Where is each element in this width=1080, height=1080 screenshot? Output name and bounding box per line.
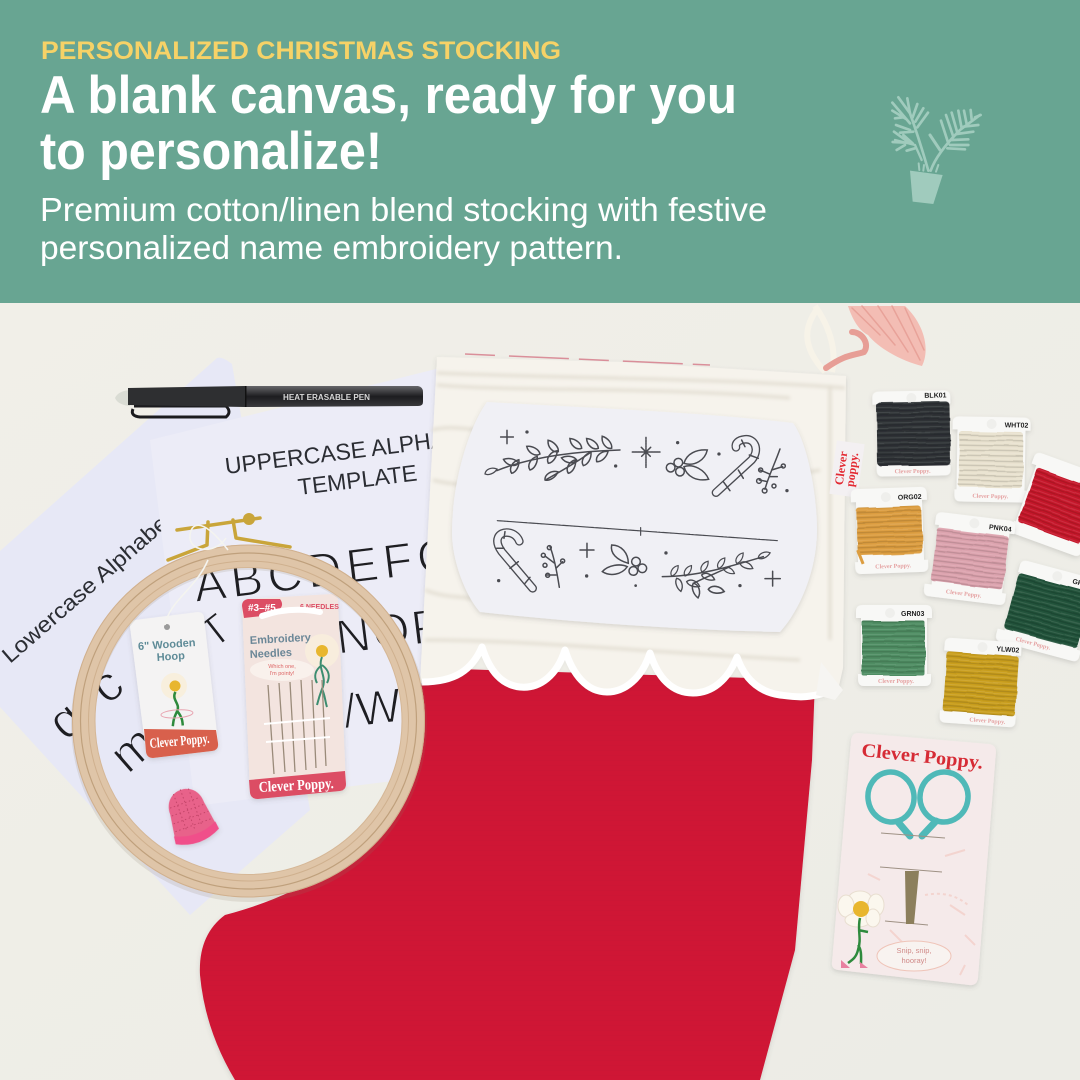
- icon: scissors handles: [865, 768, 972, 836]
- brand label on cuff: Clever: [832, 450, 850, 486]
- speech bubble: Snip, snip,: [896, 946, 932, 955]
- tassel: [826, 306, 926, 368]
- icon: thimble: [159, 782, 221, 850]
- thread: yellow: YLW02: [996, 646, 1020, 655]
- icon: potted plant: [892, 97, 981, 204]
- lowercase alphabet sheet: [0, 358, 310, 915]
- bottom sprig: [662, 550, 771, 599]
- lowercase letters: [54, 674, 145, 772]
- thread: black: [872, 390, 952, 477]
- card title: Needles: [250, 647, 292, 661]
- thread: dark green: Clever Poppy.: [1015, 637, 1051, 652]
- uppercase letters: NOP: [333, 599, 449, 665]
- sheet title: uppercase alphabet: UPPERCASE ALPHABET: [223, 421, 492, 479]
- uppercase letters: T: [191, 604, 240, 657]
- card slots: [880, 833, 945, 925]
- eyebrow heading: PERSONALIZED CHRISTMAS STOCKING: [41, 37, 561, 65]
- bottom twig: [541, 546, 565, 587]
- icon: pen: HEAT ERASABLE PEN: [283, 393, 370, 402]
- icon: flower mascot: [305, 634, 339, 707]
- thread: yellow: Clever Poppy.: [969, 717, 1006, 726]
- thread cards: [851, 390, 1080, 728]
- printed name patch: [452, 402, 817, 632]
- hoop string: [165, 525, 228, 625]
- sheet title: lowercase alphabet: Lowercase Alphabet: [0, 506, 178, 668]
- brand label on cuff: [829, 440, 865, 498]
- uppercase letters: [197, 542, 428, 728]
- uppercase letters: /W: [340, 679, 405, 739]
- thread: white: [951, 416, 1031, 503]
- thread: white: WHT02: [1005, 422, 1028, 430]
- main title: to personalize!: [40, 122, 382, 181]
- card top tab: [242, 599, 282, 618]
- thread: orange: [851, 487, 929, 574]
- lowercase letters: m: [98, 714, 167, 783]
- ribbon loop: [807, 306, 834, 372]
- needles: [268, 680, 326, 774]
- thread: dark green: [995, 558, 1080, 663]
- brand name: Clever Poppy.: [860, 740, 984, 774]
- thread: red: [1007, 451, 1080, 558]
- thread: black: Clever Poppy.: [895, 469, 931, 475]
- thread: pink: PNK04: [989, 524, 1012, 534]
- hoop tag: Clever Poppy.: [149, 732, 210, 752]
- tag text: [138, 637, 196, 664]
- scalloped trim: [422, 647, 838, 697]
- uppercase alphabet sheet: [160, 369, 436, 787]
- card footer: [249, 771, 346, 799]
- thread: yellow: [939, 637, 1022, 728]
- photo background: [0, 303, 1080, 1080]
- speech bubble: I'm pointy!: [270, 671, 295, 677]
- stocking cuff: [420, 354, 846, 700]
- tag footer: [144, 729, 218, 758]
- needles card: 6 NEEDLES: [300, 604, 339, 611]
- top sprig: [484, 435, 620, 482]
- uppercase letters: ABCDEFG: [191, 528, 462, 613]
- tag text: 6" Wooden: [138, 637, 196, 653]
- header panel: [0, 0, 1080, 303]
- thread: pink: Clever Poppy.: [945, 589, 982, 600]
- description: personalized name embroidery pattern.: [40, 229, 623, 266]
- icon: flower mascot: [158, 672, 194, 727]
- embroidery hoop: [72, 514, 424, 897]
- red lining strip: [465, 354, 710, 365]
- thread: black: BLK01: [924, 392, 947, 400]
- top twig: [757, 449, 785, 493]
- needles card: #3–#5: [248, 603, 276, 614]
- icon: scissor blades: [905, 871, 919, 924]
- tag hole: [164, 624, 170, 630]
- divider line: [497, 521, 777, 541]
- lowercase letters: c: [78, 656, 134, 714]
- top candy cane: [716, 439, 758, 493]
- main title: A blank canvas, ready for you: [40, 66, 737, 125]
- bottom candy cane: [497, 532, 533, 588]
- sheet title: uppercase alphabet: [226, 433, 432, 494]
- thread: white: Clever Poppy.: [972, 494, 1009, 500]
- thread: orange: ORG02: [898, 494, 922, 502]
- icon: pen: [115, 386, 423, 417]
- thread: green: [856, 605, 932, 686]
- thread: pink: [923, 511, 1016, 606]
- speech bubble: hooray!: [901, 956, 927, 965]
- needles card: Clever Poppy.: [258, 776, 334, 796]
- speech bubble: [877, 941, 951, 971]
- speech bubble: Which one,: [268, 664, 296, 670]
- crosses and dots: [497, 430, 789, 587]
- card title: [250, 632, 312, 661]
- embroidery pattern: [484, 430, 789, 599]
- tag text: Hoop: [156, 650, 186, 664]
- main title: [40, 66, 737, 181]
- description: Premium cotton/linen blend stocking with festive: [40, 191, 767, 228]
- icon: flower mascot: [838, 891, 884, 968]
- thread: orange: Clever Poppy.: [875, 563, 912, 571]
- top berries and leaves: [666, 450, 709, 480]
- cuff folds: [425, 373, 845, 660]
- thread: green: GRN03: [901, 611, 924, 618]
- description: [40, 191, 767, 266]
- card title: Embroidery: [250, 632, 312, 647]
- top star: [632, 437, 660, 467]
- lowercase letters: q: [36, 690, 94, 750]
- hoop hardware: [168, 514, 290, 560]
- thread: green: Clever Poppy.: [878, 679, 914, 685]
- card pattern: [860, 850, 975, 975]
- speech bubble: [250, 659, 314, 681]
- needles card: [242, 594, 346, 799]
- bottom berries and leaves: [602, 545, 647, 575]
- hoop tag: [130, 612, 218, 758]
- brand label on cuff: poppy.: [843, 452, 861, 488]
- scissors card: [832, 733, 996, 985]
- stocking body: [200, 668, 815, 1080]
- sheet title: uppercase alphabet: TEMPLATE: [296, 460, 418, 500]
